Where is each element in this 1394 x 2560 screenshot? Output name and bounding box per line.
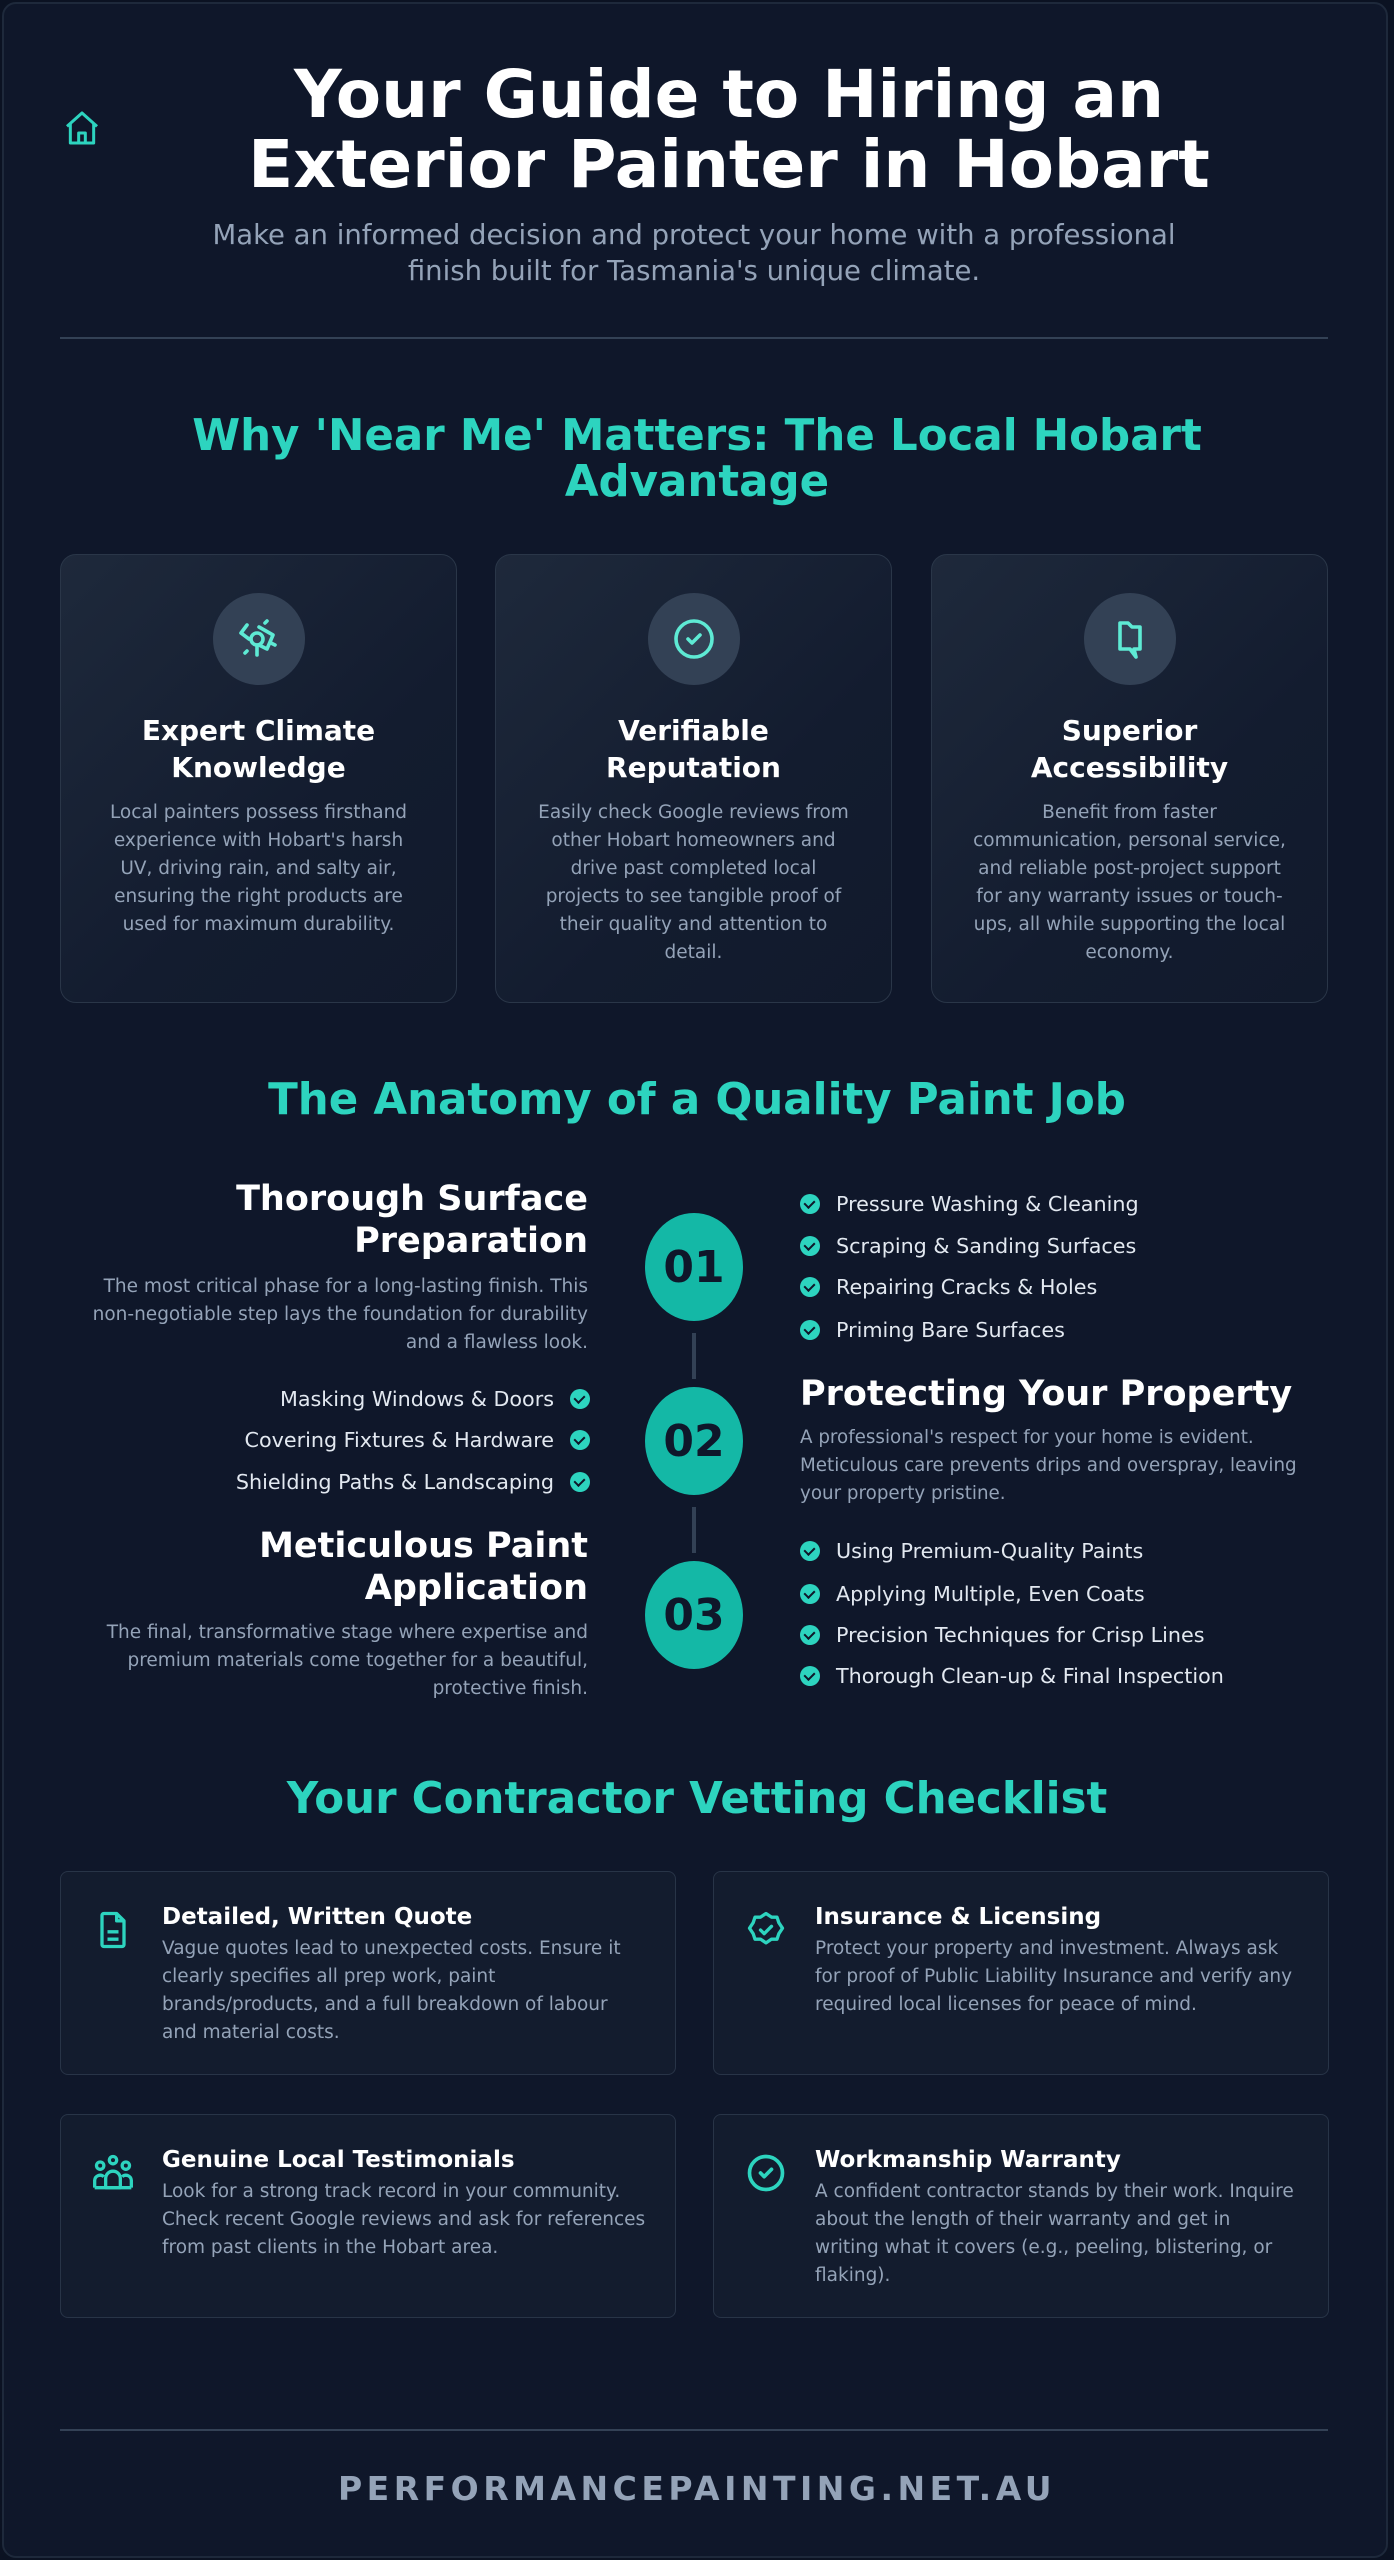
list: preparation: Repairing Cracks & Holes [836, 1275, 1097, 1299]
list: application: Precision Techniques for Crisp Lines [836, 1623, 1204, 1647]
panel: climate knowledge: Local painters possess firsthand experience with Hobart's harsh UV, driving rain, and salty air, ensuring the right products are used for maximum durability. [110, 802, 407, 935]
icon: document [100, 1912, 126, 1948]
step 02 badge [645, 1387, 743, 1495]
icon: check circle [748, 2154, 784, 2192]
step 02 title: Protecting Your Property [800, 1374, 1292, 1414]
step 03 title: Meticulous Paint [259, 1526, 588, 1566]
icon: chat [1084, 593, 1176, 685]
title: Exterior Painter in Hobart [248, 126, 1210, 203]
title [248, 56, 1210, 203]
step 01 badge: 01 [663, 1242, 725, 1292]
panel: reputation [495, 554, 892, 1003]
list: application: Thorough Clean-up & Final Inspection [836, 1664, 1224, 1688]
step 01 text [236, 1179, 588, 1261]
step 03 title [259, 1526, 588, 1608]
list: preparation [800, 1192, 1139, 1342]
list: application: Using Premium-Quality Paints [836, 1539, 1143, 1563]
panel: accessibility [931, 554, 1328, 1003]
panel: insurance [713, 1871, 1329, 2075]
list: application [800, 1539, 1224, 1688]
heading: checklist: Your Contractor Vetting Checklist [287, 1774, 1107, 1824]
icon: badge check [748, 1912, 784, 1944]
panel: climate knowledge: Expert Climate [142, 714, 375, 747]
title: Your Guide to Hiring an [294, 56, 1164, 133]
list: preparation: Scraping & Sanding Surfaces [836, 1234, 1136, 1258]
panel: warranty: A confident contractor stands by their work. Inquire about the length of their warranty and get in writing what it covers (e.g., peeling, blistering, or flaking). [815, 2181, 1294, 2286]
panel: accessibility: Accessibility [1031, 751, 1228, 784]
step 01 text: Preparation [354, 1221, 588, 1261]
panel: written quote: Vague quotes lead to unexpected costs. Ensure it clearly specifies all prep work, paint brands/products, and a full breakdown of labour and material costs. [162, 1938, 621, 2043]
panel: reputation: Easily check Google reviews from other Hobart homeowners and drive past completed local projects to see tangible proof of their quality and attention to detail. [538, 802, 849, 963]
heading: local advantage: Why 'Near Me' Matters: The Local Hobart Advantage [192, 411, 1202, 507]
icon: check circle [648, 593, 740, 685]
footer: PERFORMANCEPAINTING.NET.AU [338, 2469, 1056, 2508]
list: application: Applying Multiple, Even Coats [836, 1582, 1145, 1606]
panel: testimonials [60, 2114, 676, 2318]
list: preparation: Pressure Washing & Cleaning [836, 1192, 1139, 1216]
step 01 description: The most critical phase for a long-lasting finish. This non-negotiable step lays the foundation for durability and a flawless look. [93, 1276, 588, 1353]
step 02 badge: 02 [663, 1416, 725, 1466]
panel: reputation: Reputation [606, 751, 781, 784]
icon: climate [213, 593, 305, 685]
panel: written quote [60, 1871, 676, 2075]
step 03 title: Application [365, 1568, 588, 1608]
panel: insurance: Insurance & Licensing [815, 1904, 1101, 1930]
list: protecting: Covering Fixtures & Hardware [245, 1428, 554, 1452]
icon: users [93, 2154, 133, 2190]
panel: accessibility: Superior [1062, 714, 1197, 747]
panel: reputation: Verifiable [618, 714, 769, 747]
step 03 description: The final, transformative stage where expertise and premium materials come together for a beautiful, protective finish. [107, 1622, 588, 1699]
step 03 badge: 03 [663, 1590, 725, 1640]
list: preparation: Priming Bare Surfaces [836, 1318, 1065, 1342]
panel: climate knowledge [60, 554, 457, 1003]
list: protecting: Masking Windows & Doors [280, 1387, 554, 1411]
step 02 description: A professional's respect for your home is evident. Meticulous care prevents drips and overspray, leaving your property pristine. [800, 1427, 1297, 1504]
step 01 text: Thorough Surface [236, 1179, 588, 1219]
panel: accessibility: Benefit from faster communication, personal service, and reliable post-project support for any warranty issues or touch-ups, all while supporting the local economy. [973, 802, 1286, 963]
panel: warranty [713, 2114, 1329, 2318]
list: protecting [236, 1387, 590, 1494]
panel: warranty: Workmanship Warranty [815, 2147, 1121, 2173]
panel: testimonials: Look for a strong track record in your community. Check recent Google reviews and ask for references from past clients in the Hobart area. [162, 2181, 645, 2258]
list: protecting: Shielding Paths & Landscaping [236, 1470, 554, 1494]
step 03 badge [645, 1561, 743, 1669]
panel: testimonials: Genuine Local Testimonials [162, 2147, 515, 2173]
subtitle: Make an informed decision and protect your home with a professional finish built for Tasmania's unique climate. [212, 219, 1176, 287]
step 01 badge [645, 1213, 743, 1321]
panel: written quote: Detailed, Written Quote [162, 1904, 472, 1930]
heading: anatomy: The Anatomy of a Quality Paint Job [268, 1075, 1126, 1125]
icon: home [66, 111, 98, 144]
panel: insurance: Protect your property and investment. Always ask for proof of Public Liability Insurance and verify any required local licenses for peace of mind. [815, 1938, 1292, 2015]
panel: climate knowledge: Knowledge [171, 751, 346, 784]
